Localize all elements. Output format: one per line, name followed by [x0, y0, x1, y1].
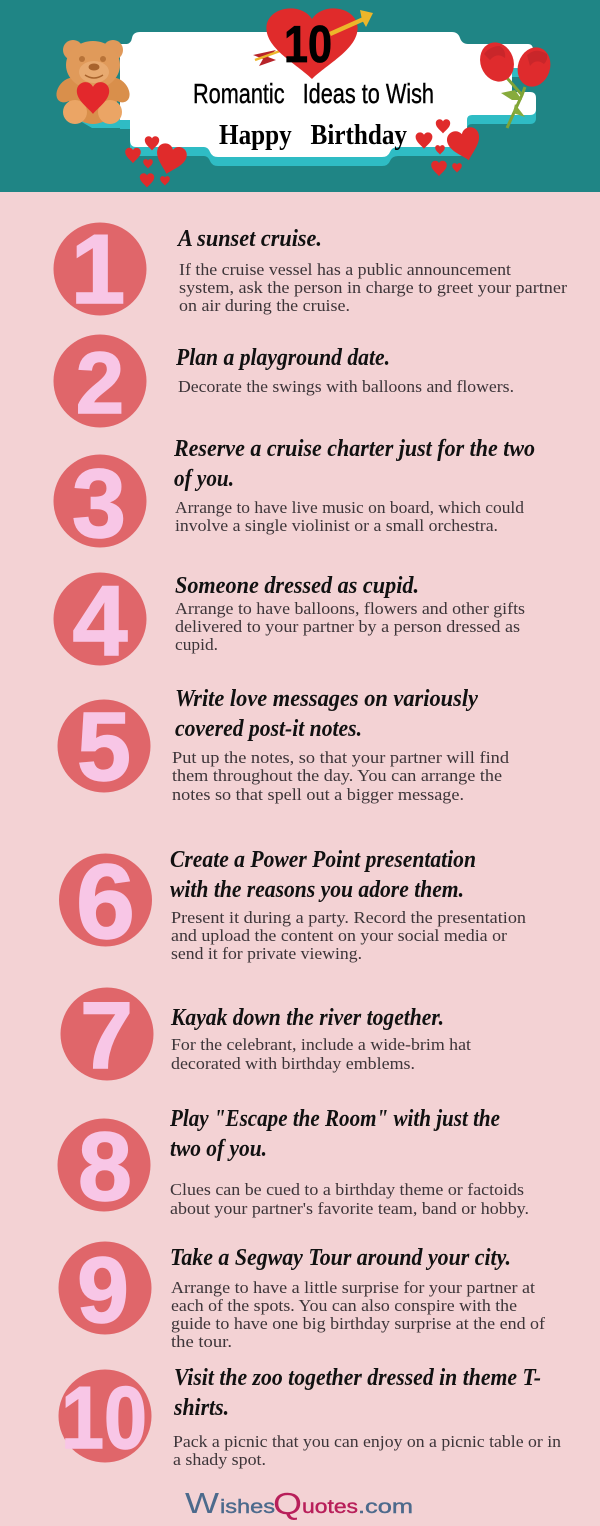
body 4: Arrange to have balloons, flowers and other gifts: [175, 599, 525, 618]
body 1: If the cruise vessel has a public announcement: [179, 260, 511, 279]
body 10: Pack a picnic that you can enjoy on a picnic table or in: [173, 1432, 561, 1451]
number badge 4: 4: [72, 565, 128, 676]
number badge 7: 7: [80, 983, 133, 1089]
heading 3: [173, 436, 535, 492]
icon: teddy bear: [52, 40, 134, 124]
title line two: Happy Birthday: [219, 119, 407, 151]
number badge 1: 1: [71, 214, 125, 324]
icon: hearts left: [125, 136, 189, 187]
body 7: [171, 1035, 471, 1073]
body 9: Arrange to have a little surprise for your partner at: [171, 1278, 535, 1297]
body 9: [171, 1278, 546, 1351]
heading 9: Take a Segway Tour around your city.: [170, 1245, 511, 1271]
body 3: involve a single violinist or a small orchestra.: [175, 516, 498, 535]
number badge 8: 8: [78, 1112, 132, 1221]
item 1: [54, 214, 568, 324]
number badge 9: 9: [77, 1238, 129, 1342]
heading 5: covered post-it notes.: [175, 716, 362, 742]
body 4: [175, 599, 525, 654]
heading 6: Create a Power Point presentation: [170, 847, 476, 873]
heading 2: Plan a playground date.: [175, 345, 390, 371]
heading 3: of you.: [174, 466, 234, 492]
body 4: delivered to your partner by a person dressed as: [175, 617, 520, 636]
body 6: send it for private viewing.: [171, 944, 362, 963]
number badge 8: [58, 1112, 150, 1221]
body 5: notes so that spell out a bigger message.: [172, 785, 464, 804]
number badge 6: 6: [76, 843, 135, 961]
title line one: Romantic Ideas to Wish: [193, 78, 434, 109]
body 9: the tour.: [171, 1332, 232, 1351]
item 2: [54, 334, 514, 432]
body 9: guide to have one big birthday surprise at the end of: [171, 1314, 546, 1333]
item 9: [58, 1238, 546, 1351]
body 10: [173, 1432, 561, 1469]
number badge 6: [59, 843, 152, 961]
item 10: [58, 1365, 561, 1469]
number badge 4: [54, 565, 146, 676]
heading 6: [170, 847, 476, 903]
body 1: [179, 260, 568, 315]
heading 10: Visit the zoo together dressed in theme T-: [174, 1365, 541, 1391]
body 9: each of the spots. You can also conspire with the: [171, 1296, 517, 1315]
icon: hearts right: [416, 119, 485, 176]
body 7: For the celebrant, include a wide-brim hat: [171, 1035, 471, 1054]
body 3: Arrange to have live music on board, which could: [175, 498, 525, 517]
heading 10: shirts.: [173, 1395, 229, 1421]
number badge 2: [54, 334, 146, 432]
number badge 2: 2: [76, 335, 124, 432]
number badge 10: 10: [61, 1368, 147, 1467]
heading 3: Reserve a cruise charter just for the two: [173, 436, 535, 462]
logo: WishesQuotes.com: Q: [273, 1486, 302, 1521]
body 6: and upload the content on your social media or: [171, 926, 508, 945]
heading 6: with the reasons you adore them.: [170, 877, 464, 903]
item 6: [59, 843, 526, 963]
title number: 10: [284, 16, 332, 74]
item 3: [54, 436, 535, 558]
number badge 5: 5: [77, 692, 131, 801]
item 8: [58, 1106, 529, 1221]
logo: WishesQuotes.com: [185, 1486, 413, 1521]
number badge 3: [54, 449, 146, 558]
body 4: cupid.: [175, 635, 218, 654]
body 1: on air during the cruise.: [179, 296, 350, 315]
body 3: [175, 498, 525, 535]
body 5: [172, 748, 510, 804]
body 5: them throughout the day. You can arrange the: [172, 766, 502, 785]
body 6: Present it during a party. Record the presentation: [171, 908, 526, 927]
logo: WishesQuotes.com: W: [185, 1488, 220, 1520]
heading 8: two of you.: [170, 1136, 267, 1162]
item 7: [60, 983, 471, 1089]
icon: heart with arrow: [253, 8, 373, 79]
body 10: a shady spot.: [173, 1450, 266, 1469]
heading 8: [169, 1106, 500, 1162]
header band: [0, 0, 600, 192]
logo: WishesQuotes.com: .com: [358, 1497, 413, 1518]
body 6: [171, 908, 526, 963]
logo: WishesQuotes.com: ishes: [220, 1497, 275, 1518]
heading 10: [173, 1365, 541, 1421]
body 8: about your partner's favorite team, band or hobby.: [170, 1199, 529, 1218]
body 8: [170, 1180, 529, 1218]
body 8: Clues can be cued to a birthday theme or factoids: [170, 1180, 524, 1199]
body 5: Put up the notes, so that your partner will find: [172, 748, 510, 767]
number badge 1: [54, 214, 146, 324]
body 7: decorated with birthday emblems.: [171, 1054, 415, 1073]
number badge 7: [60, 983, 154, 1089]
item 4: [54, 565, 525, 676]
heading 4: Someone dressed as cupid.: [175, 573, 419, 599]
heading 5: [175, 686, 478, 742]
heading 8: Play "Escape the Room" with just the: [169, 1106, 500, 1132]
logo: WishesQuotes.com: uotes: [302, 1497, 358, 1518]
body 1: system, ask the person in charge to greet your partner: [179, 278, 568, 297]
heading 5: Write love messages on variously: [175, 686, 478, 712]
number badge 9: [58, 1238, 152, 1342]
body 2: Decorate the swings with balloons and flowers.: [178, 377, 514, 396]
number badge 5: [58, 692, 150, 801]
icon: roses: [475, 38, 555, 128]
item 5: [58, 686, 510, 804]
banner plaque: [80, 32, 536, 166]
heading 1: A sunset cruise.: [176, 226, 322, 252]
number badge 3: 3: [72, 449, 126, 558]
heading 7: Kayak down the river together.: [170, 1005, 444, 1031]
